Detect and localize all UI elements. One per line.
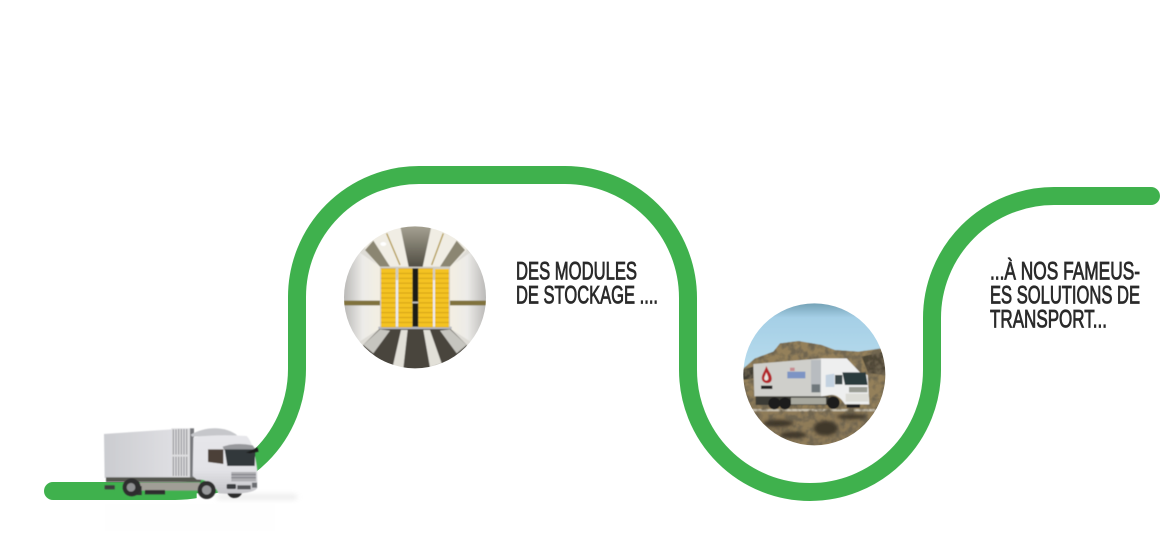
infographic canvas: [44, 166, 1160, 501]
chassis: [105, 477, 201, 494]
yellow crates: [381, 268, 449, 327]
back of trailer: [380, 267, 450, 328]
cab: [191, 428, 259, 494]
front wheels: [198, 481, 242, 499]
cargo box: [104, 429, 172, 478]
hill and ground texture: [742, 340, 888, 450]
rear wheels: [123, 478, 142, 496]
sky: [744, 303, 880, 369]
side vents: [171, 428, 194, 477]
ceiling: [365, 225, 467, 268]
text: storage modules: [516, 258, 658, 310]
photo: yellow storage modules in trailer: [342, 225, 488, 372]
photo: white truck at route start: [104, 428, 298, 531]
rack posts: [397, 280, 434, 327]
ground shadow: [105, 493, 298, 531]
photo: white truck on desert road: [742, 302, 888, 450]
ground scrub patches: [763, 414, 867, 438]
ground: [752, 408, 876, 446]
text: storage modules: DE STOCKAGE ....: [516, 282, 658, 310]
hill: [742, 341, 888, 415]
left wall: [344, 254, 380, 341]
right wall: [450, 254, 486, 341]
cab: [821, 358, 869, 404]
text: transport solutions: [990, 256, 1140, 334]
wall rails: [344, 300, 486, 306]
truck body: [104, 428, 259, 499]
text: storage modules: DES MODULES: [516, 258, 637, 286]
text: transport solutions: TRANSPORT...: [990, 306, 1107, 334]
undercarriage: [756, 396, 829, 405]
floor: [362, 327, 468, 372]
trailer: [753, 358, 821, 397]
wheels: [768, 396, 860, 409]
green route line: [53, 175, 1151, 492]
